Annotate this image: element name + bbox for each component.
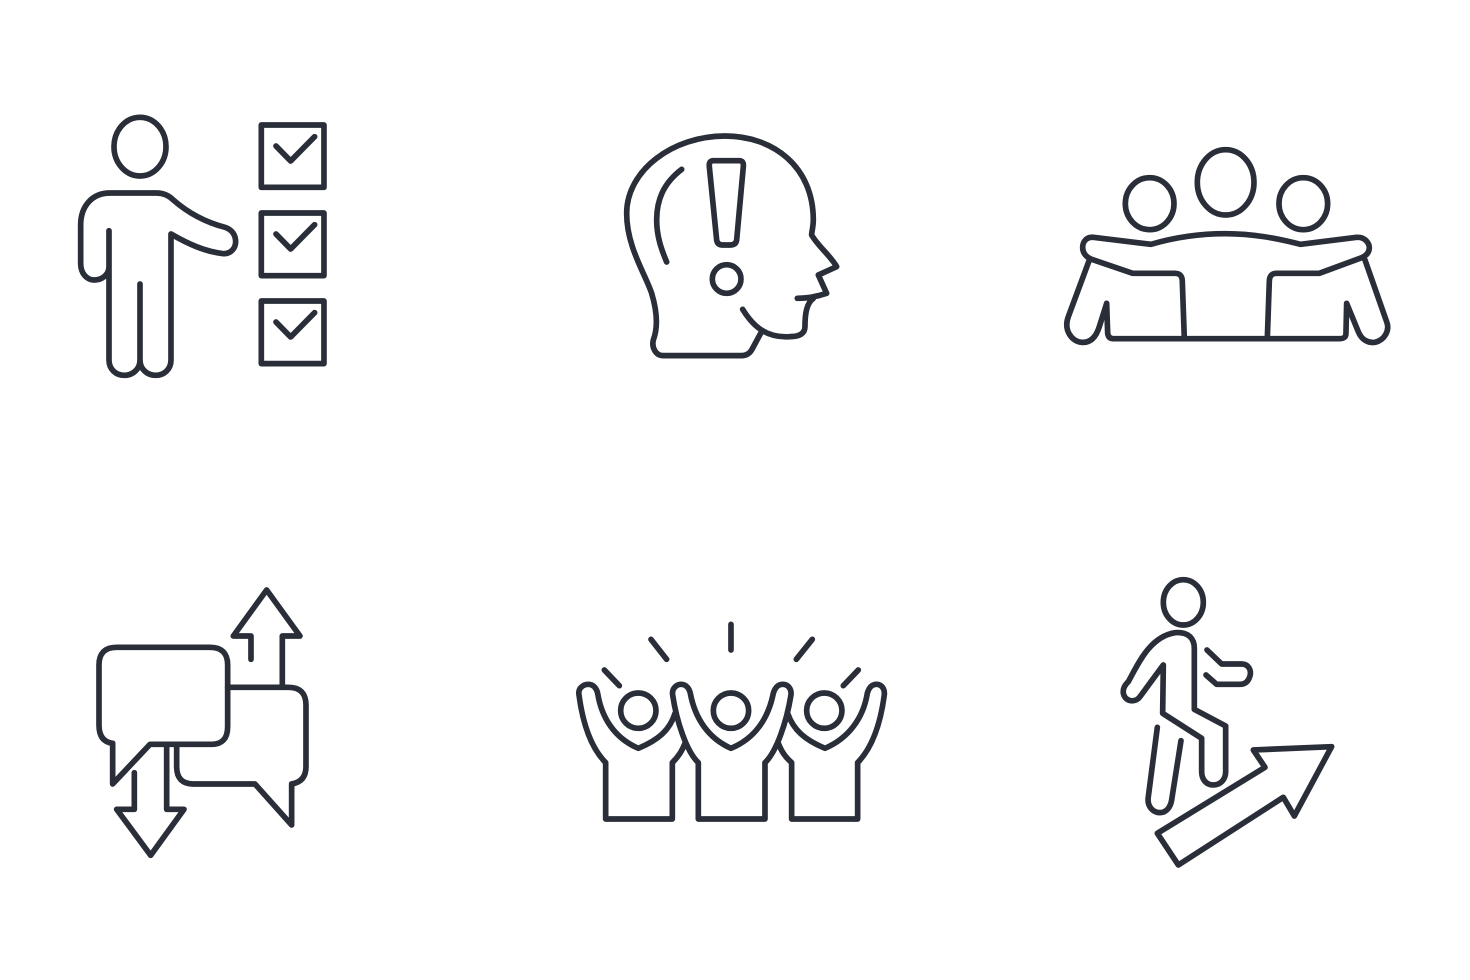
icon: three people cheering — [579, 624, 884, 819]
centre head — [1197, 150, 1254, 215]
rising arrow — [1157, 747, 1332, 865]
person body — [81, 193, 236, 375]
person right — [778, 684, 884, 819]
checklist box 1 — [261, 125, 324, 187]
exclamation mark dot — [712, 265, 741, 293]
icon: speech bubbles with up and down arrows — [99, 590, 306, 855]
person head — [114, 117, 166, 176]
checklist box 3 — [261, 301, 324, 364]
torso outline — [1067, 260, 1388, 342]
head right — [807, 693, 842, 728]
icon: person stepping up on arrow — [1123, 580, 1332, 865]
exclamation mark bar — [709, 161, 743, 245]
celebration rays — [604, 624, 858, 686]
right speech bubble — [177, 687, 306, 825]
left head — [1125, 178, 1174, 230]
linked arms — [1083, 234, 1369, 339]
down arrow — [117, 745, 184, 855]
head left — [621, 693, 656, 728]
icon: three people embracing — [1067, 150, 1388, 342]
head — [1163, 580, 1203, 625]
person centre — [673, 684, 791, 819]
body and front leg — [1123, 633, 1226, 785]
head centre — [713, 693, 749, 728]
right head — [1279, 178, 1328, 230]
icon: person presenting checklist — [81, 117, 324, 375]
icon: head with exclamation mark — [627, 136, 837, 356]
head profile — [627, 136, 837, 356]
forward arm — [1206, 650, 1250, 684]
back leg — [1148, 727, 1181, 813]
left speech bubble — [99, 647, 228, 784]
person left — [579, 684, 685, 819]
checklist box 2 — [261, 213, 324, 276]
inner arc — [657, 169, 682, 262]
up arrow — [233, 590, 300, 687]
